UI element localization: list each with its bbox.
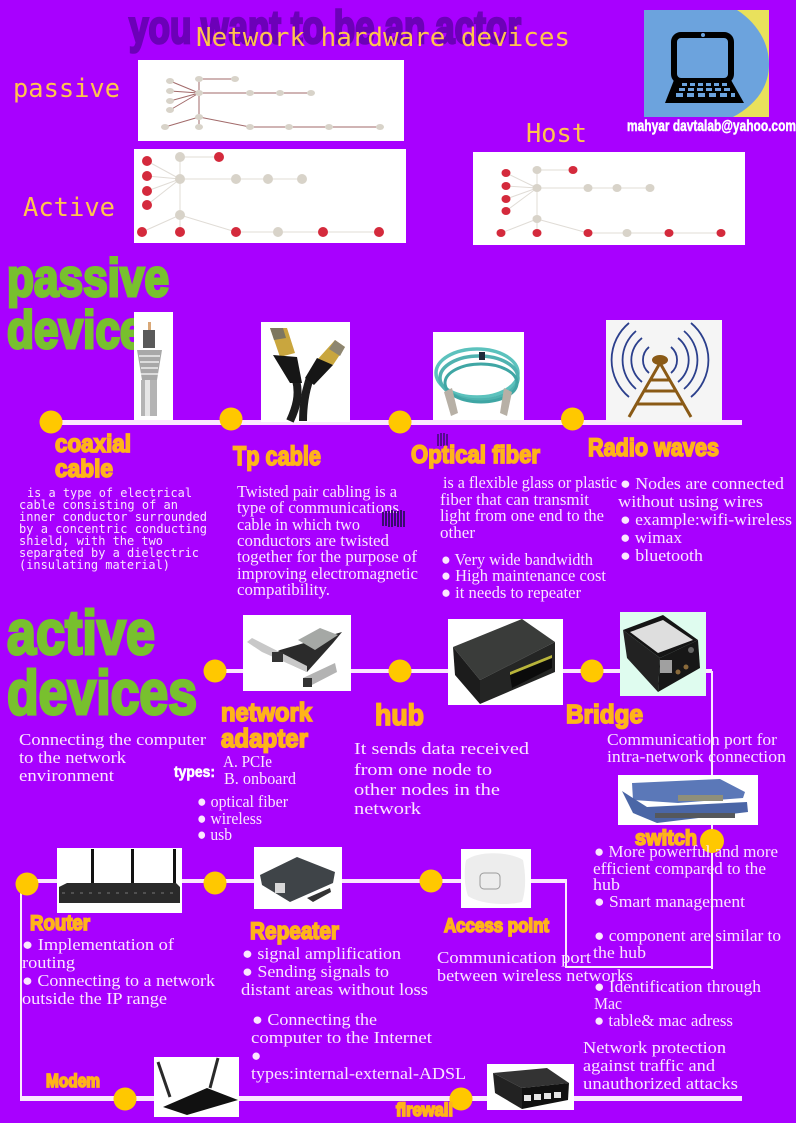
section: optical fiber xyxy=(411,441,617,602)
text: modem description: ● Connecting the xyxy=(252,1010,377,1029)
section: switch: ● More powerful and more xyxy=(594,842,778,861)
section: repeater: ● signal amplification xyxy=(242,944,402,963)
heading: active devices: devices xyxy=(7,659,197,728)
heading: passive devices xyxy=(7,249,169,360)
image: hub xyxy=(448,619,563,705)
section: coaxial cable: shield, with the two xyxy=(19,534,163,548)
section: hub xyxy=(354,699,530,818)
section: hub: other nodes in the xyxy=(354,780,500,799)
heading: passive devices: devices xyxy=(7,301,169,360)
diagram: hosts highlighted xyxy=(473,152,745,245)
section: coaxial cable xyxy=(19,430,207,572)
image: access point xyxy=(461,849,531,908)
section: network adapter: adapter xyxy=(221,723,308,753)
section: optical fiber: Optical fiber xyxy=(411,441,540,469)
nodes: passive row xyxy=(40,408,584,434)
section: router: ● Connecting to a network xyxy=(22,971,216,990)
section: tp cable: Tp cable xyxy=(233,441,321,471)
section: access point: Access point xyxy=(444,916,550,937)
section: coaxial cable: cable consisting of an xyxy=(19,498,178,512)
section: coaxial cable: cable xyxy=(55,455,113,483)
section: bridge xyxy=(566,699,787,766)
section: network adapter: network xyxy=(221,697,312,727)
text: firewall description: Network protection xyxy=(583,1038,727,1057)
section: repeater: ● Sending signals to xyxy=(242,962,389,981)
heading: passive devices: passive xyxy=(7,249,169,308)
image: coaxial cable xyxy=(134,312,173,420)
text: active devices intro: Connecting the computer xyxy=(19,730,206,749)
section: bridge: Bridge xyxy=(566,699,643,729)
section: network adapter: B. onboard xyxy=(224,769,296,788)
section: network adapter: ● optical fiber xyxy=(197,792,288,811)
section: repeater xyxy=(241,918,428,999)
section: router: ● Implementation of xyxy=(22,935,174,954)
text: modem description: computer to the Internet xyxy=(251,1028,432,1047)
section: switch: ● Identification through xyxy=(594,977,762,996)
section: switch xyxy=(593,827,781,1030)
section: router: outside the IP range xyxy=(22,989,167,1008)
image: twisted pair cable xyxy=(261,322,350,422)
section: radio waves: ● Nodes are connected xyxy=(620,474,785,493)
section: switch: ● table& mac adress xyxy=(594,1011,733,1030)
section: tp cable: improving electromagnetic xyxy=(237,564,418,583)
section: tp cable: together for the purpose of xyxy=(237,547,417,566)
section: router xyxy=(22,912,216,1008)
mark: dark bars near tp text xyxy=(383,510,404,527)
text: modem description: types:internal-external-ADSL xyxy=(251,1064,466,1083)
section: radio waves xyxy=(588,434,792,565)
section: optical fiber: ● it needs to repeater xyxy=(441,583,581,602)
image: radio tower xyxy=(606,320,722,422)
section: optical fiber: is a flexible glass or plastic xyxy=(443,473,617,492)
section: optical fiber: fiber that can transmit xyxy=(440,490,589,509)
label: active: Active xyxy=(23,193,115,223)
timeline: passive row xyxy=(51,420,742,425)
section: tp cable: type of communications xyxy=(237,498,399,517)
mark: dark bars near optical fiber xyxy=(438,433,447,446)
ghost heading: you want to be an actor xyxy=(129,1,521,53)
section: network adapter: A. PCIe xyxy=(223,752,272,771)
section: switch: ● component are similar to xyxy=(594,926,781,945)
section: radio waves: without using wires xyxy=(618,492,763,511)
section: network adapter: ● wireless xyxy=(197,809,262,828)
nodes: bottom row xyxy=(114,1088,472,1110)
section: tp cable xyxy=(233,441,418,599)
section: repeater: Repeater xyxy=(250,918,339,945)
image: repeater xyxy=(254,847,342,909)
label: modem: Modem xyxy=(46,1071,100,1091)
section: coaxial cable: (insulating material) xyxy=(19,558,170,572)
section: access point: between wireless networks xyxy=(437,966,633,985)
node: switch xyxy=(700,829,724,853)
label: firewall: firewall xyxy=(396,1100,453,1120)
section: network adapter xyxy=(174,697,312,844)
text: active devices intro: environment xyxy=(19,766,114,785)
text: active devices intro xyxy=(19,730,206,785)
section: coaxial cable: by a concentric conducting xyxy=(19,522,207,536)
section: switch: the hub xyxy=(593,943,646,962)
section: bridge: intra-network connection xyxy=(607,747,787,766)
section: router: routing xyxy=(22,953,76,972)
section: tp cable: Twisted pair cabling is a xyxy=(237,482,397,501)
section: repeater: distant areas without loss xyxy=(241,980,428,999)
section: hub: hub xyxy=(375,699,424,732)
heading: active devices xyxy=(7,599,197,728)
section: access point: Communication port xyxy=(437,948,591,967)
icon: laptop logo xyxy=(644,10,769,117)
image: network adapter xyxy=(243,615,351,691)
section: hub: It sends data received xyxy=(354,739,530,758)
label: passive: passive xyxy=(13,74,120,104)
section: optical fiber: ● Very wide bandwidth xyxy=(441,550,593,569)
image: router xyxy=(57,848,182,913)
section: switch: switch xyxy=(635,827,697,850)
text: firewall description: unauthorized attacks xyxy=(583,1074,738,1093)
section: bridge: Communication port for xyxy=(607,730,777,749)
image: modem xyxy=(154,1057,239,1117)
text: firewall description: against traffic and xyxy=(583,1056,716,1075)
section: coaxial cable: is a type of electrical xyxy=(27,486,192,500)
section: radio waves: ● wimax xyxy=(620,528,682,547)
text: firewall description xyxy=(583,1038,738,1093)
section: tp cable: cable in which two xyxy=(237,515,360,534)
nodes: active row xyxy=(204,660,604,682)
section: radio waves: ● example:wifi-wireless xyxy=(620,510,792,529)
section: tp cable: conductors are twisted xyxy=(237,531,389,550)
heading: active devices: active xyxy=(7,599,155,668)
image: bridge xyxy=(620,612,706,696)
section: switch: ● Smart management xyxy=(594,892,745,911)
section: network adapter: ● usb xyxy=(197,825,232,844)
image: firewall xyxy=(487,1064,574,1110)
section: switch: hub xyxy=(593,875,620,894)
text: active devices intro: to the network xyxy=(19,748,127,767)
section: router: Router xyxy=(30,912,90,935)
section: coaxial cable: inner conductor surrounded xyxy=(19,510,207,524)
nodes: third row xyxy=(16,870,442,896)
title: Network hardware devices xyxy=(196,23,570,53)
section: optical fiber: light from one end to the xyxy=(440,506,604,525)
section: radio waves: Radio waves xyxy=(588,434,719,462)
section: access point xyxy=(437,916,633,985)
section: tp cable: compatibility. xyxy=(237,580,330,599)
section: radio waves: ● bluetooth xyxy=(620,546,704,565)
section: optical fiber: ● High maintenance cost xyxy=(441,566,606,585)
text: modem description xyxy=(251,1010,466,1083)
section: coaxial cable: separated by a dielectric xyxy=(19,546,199,560)
connector: active device path xyxy=(20,669,742,1101)
text: modem description: ● xyxy=(251,1046,261,1065)
section: optical fiber: other xyxy=(440,523,475,542)
diagram: passive devices highlighted xyxy=(138,60,404,141)
section: hub: from one node to xyxy=(354,760,492,779)
section: coaxial cable: coaxial xyxy=(55,430,131,458)
section: network adapter: types: xyxy=(174,764,215,781)
image: switch xyxy=(618,775,758,825)
section: switch: Mac xyxy=(594,994,622,1013)
image: optical fiber xyxy=(433,332,524,420)
diagram: active devices highlighted xyxy=(134,149,406,243)
section: switch: efficient compared to the xyxy=(593,859,766,878)
label: host: Host xyxy=(526,119,587,149)
section: hub: network xyxy=(354,799,422,818)
